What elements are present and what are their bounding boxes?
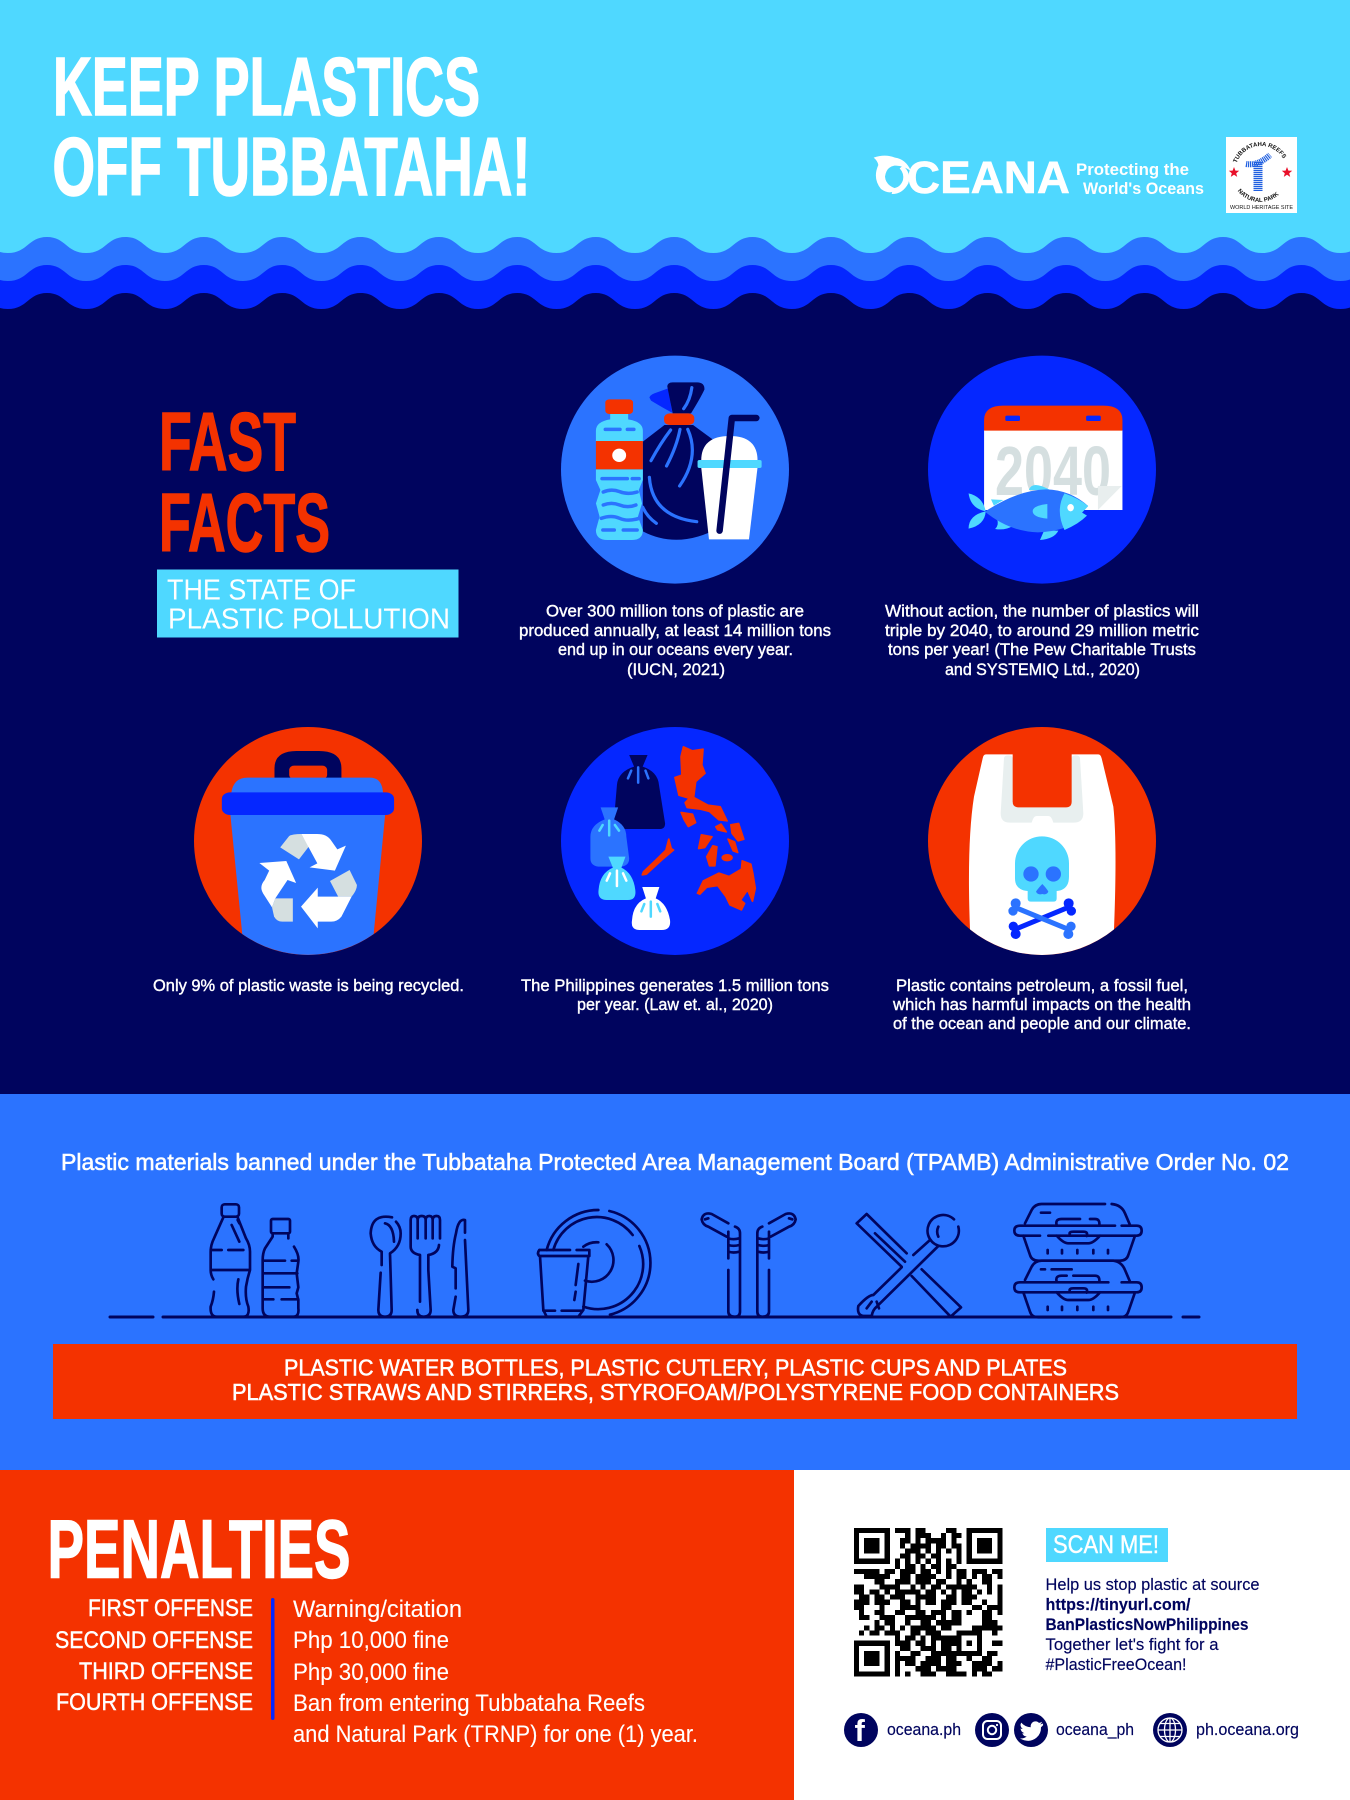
map: Philippines [642, 747, 755, 910]
QR code [854, 1531, 1002, 1674]
title: OFF TUBBATAHA! [52, 120, 530, 213]
panel: penalties [0, 1470, 794, 1800]
icon: Philippines map with bags [561, 727, 789, 955]
subheading: the state of plastic pollution: PLASTIC POLLUTION [168, 604, 450, 636]
waves [0, 237, 1350, 386]
text: fact 1: (IUCN, 2021) [627, 660, 725, 679]
icon: bottle, trash bag and cup [561, 356, 789, 584]
subheading: the state of plastic pollution: THE STATE OF [167, 574, 356, 606]
text: fact 4: The Philippines generates 1.5 million tons [521, 976, 829, 995]
icon: dolphin O [874, 156, 911, 194]
text: fact 2: Without action, the number of plastics will [885, 602, 1199, 620]
penalty descriptions [293, 1596, 698, 1748]
social: website [1153, 1713, 1299, 1747]
panel: banned materials [0, 1094, 1350, 1470]
text: call to action: BanPlasticsNowPhilippines [1046, 1615, 1248, 1634]
social: facebook: oceana.ph [887, 1720, 961, 1739]
logo: Oceana: Protecting the [1076, 160, 1189, 179]
panel: header [0, 0, 1350, 320]
logo: Tubbataha Reefs Natural Park: WORLD HERITAGE SITE [1230, 205, 1293, 211]
banner: banned items: PLASTIC STRAWS AND STIRRERS, STYROFOAM/POLYSTYRENE FOOD CONTAINERS [232, 1379, 1119, 1405]
logo: Tubbataha Reefs Natural Park [1226, 137, 1297, 213]
text: call to action: #PlasticFreeOcean! [1046, 1655, 1186, 1674]
offense labels [55, 1595, 253, 1716]
icon: plastic bottles [211, 1204, 298, 1317]
text: fact 5: Plastic contains petroleum, a fossil fuel, [896, 976, 1188, 995]
text: call to action: https://tinyurl.com/ [1046, 1595, 1191, 1614]
title [52, 40, 530, 213]
subheading: the state of plastic pollution [157, 570, 458, 638]
text: call to action [1046, 1575, 1260, 1674]
icon: plastic straws [702, 1213, 796, 1317]
icon: plastic stirrers [857, 1214, 961, 1317]
social: twitter [1014, 1713, 1134, 1747]
text: call to action: Help us stop plastic at source [1046, 1575, 1260, 1594]
penalty descriptions: Warning/citation [293, 1596, 462, 1623]
offense labels: SECOND OFFENSE [55, 1627, 253, 1654]
icon: styrofoam containers [1014, 1204, 1142, 1317]
icon: plastic cup and plate [538, 1210, 650, 1317]
penalty descriptions: and Natural Park (TRNP) for one (1) year. [293, 1721, 698, 1748]
logo: Tubbataha Reefs Natural Park: NATURAL PARK [1238, 188, 1279, 202]
text: fact 2: tons per year! (The Pew Charitable Trusts [888, 640, 1196, 659]
penalty descriptions: Php 30,000 fine [293, 1659, 449, 1686]
text: fact 5 [892, 976, 1191, 1033]
heading: fast facts: FACTS [159, 476, 330, 569]
divider bar [271, 1598, 274, 1720]
social: facebook: f [854, 1713, 866, 1748]
panel: fast facts [0, 320, 1350, 1094]
icon: plastic cutlery [371, 1216, 468, 1317]
heading: penalties: PENALTIES [48, 1502, 350, 1596]
icon: 2040 calendar and fish: 2040 [995, 432, 1111, 510]
logo: Oceana [874, 152, 1204, 203]
text: fact 1 [519, 602, 831, 679]
title: KEEP PLASTICS [53, 40, 480, 133]
text: fact 1: produced annually, at least 14 million tons [519, 621, 831, 640]
logo: Tubbataha Reefs Natural Park: TUBBATAHA REEFS [1232, 142, 1286, 162]
penalty descriptions: Php 10,000 fine [293, 1627, 449, 1654]
penalty descriptions: Ban from entering Tubbataha Reefs [293, 1690, 645, 1717]
text: call to action: Together let's fight for a [1046, 1635, 1219, 1654]
text: fact 4: per year. (Law et. al., 2020) [577, 995, 773, 1014]
offense labels: FIRST OFFENSE [88, 1595, 253, 1622]
label: scan me: SCAN ME! [1053, 1531, 1159, 1559]
icon: recycling bin [194, 727, 422, 955]
offense labels: FOURTH OFFENSE [56, 1689, 253, 1716]
floor line [110, 1316, 1199, 1318]
text: fact 3: Only 9% of plastic waste is being recycled. [153, 976, 464, 995]
offense labels: THIRD OFFENSE [79, 1658, 253, 1685]
heading: fast facts [159, 395, 330, 569]
logo: Oceana: World's Oceans [1083, 179, 1204, 198]
heading: fast facts: FAST [159, 395, 296, 488]
social: instagram [975, 1713, 1009, 1747]
social: facebook [844, 1713, 961, 1748]
text: fact 1: Over 300 million tons of plastic are [546, 602, 804, 620]
icon: 2040 calendar and fish [928, 356, 1156, 584]
social: twitter: oceana_ph [1056, 1720, 1134, 1739]
text: fact 2 [885, 602, 1199, 679]
text: fact 5: which has harmful impacts on the health [892, 995, 1191, 1014]
banner: banned items [53, 1344, 1297, 1419]
panel: scan and contact [794, 1470, 1350, 1800]
text: fact 5: of the ocean and people and our climate. [893, 1014, 1191, 1033]
text: fact 2: triple by 2040, to around 29 million metric [885, 621, 1199, 640]
text: fact 1: end up in our oceans every year. [558, 640, 793, 659]
heading: banned materials: Plastic materials banned under the Tubbataha Protected Area Management Board (TPAMB) Administrative Order No. 02 [61, 1149, 1289, 1175]
icon: plastic bag with skull [928, 727, 1156, 955]
banner: banned items: PLASTIC WATER BOTTLES, PLASTIC CUTLERY, PLASTIC CUPS AND PLATES [284, 1354, 1067, 1380]
text: fact 2: and SYSTEMIQ Ltd., 2020) [945, 660, 1140, 679]
logo: Oceana: CEANA [907, 152, 1070, 203]
text: fact 4 [521, 976, 829, 1014]
social: website: ph.oceana.org [1196, 1720, 1299, 1739]
